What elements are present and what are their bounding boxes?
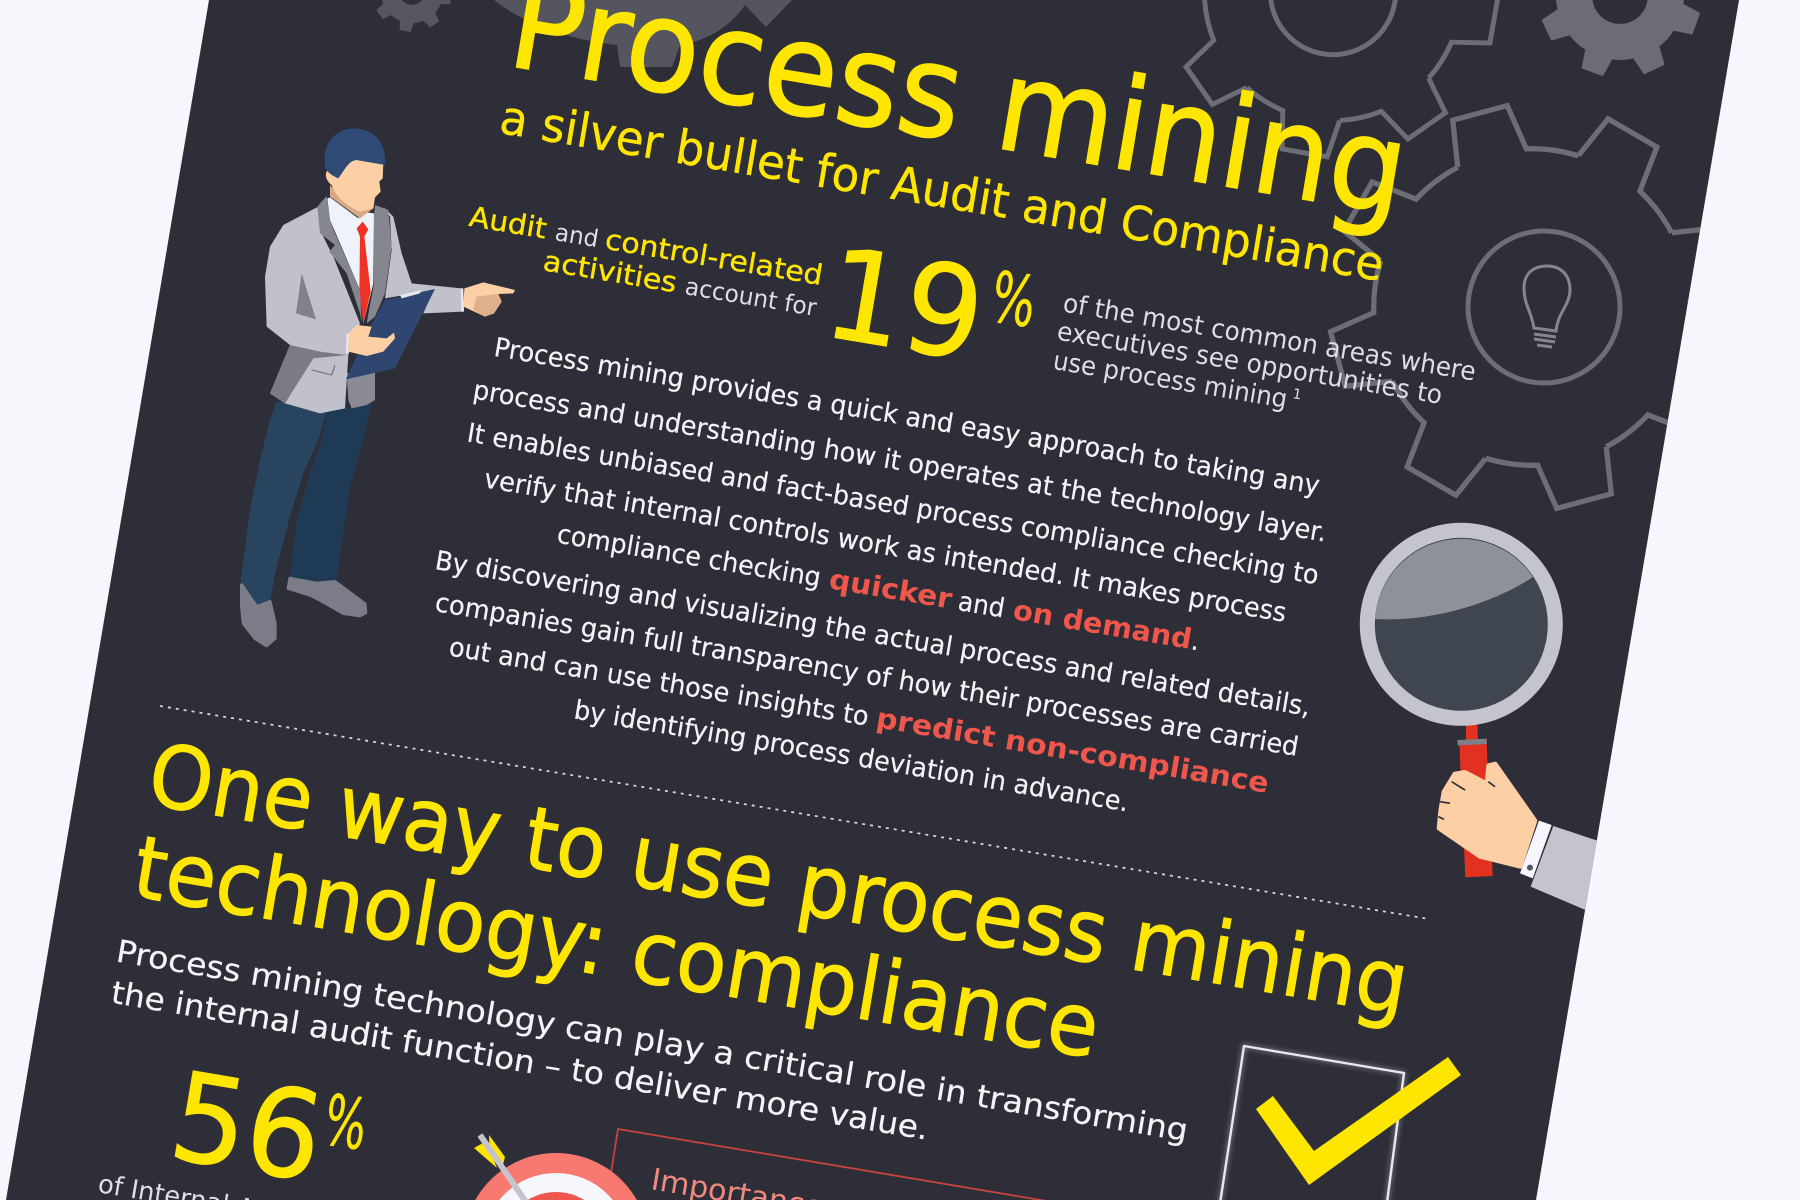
icon: large outline gear with lightbulb xyxy=(1328,102,1701,512)
stat: 19 percent: % xyxy=(985,256,1042,344)
stat intro text: control-related xyxy=(603,223,825,292)
dotted divider xyxy=(160,706,1429,919)
stat intro text: account for xyxy=(683,272,819,322)
stat description: 1 xyxy=(1291,386,1303,403)
stat: 56 percent: % xyxy=(318,1079,373,1167)
icon: target with arrow xyxy=(463,1135,649,1200)
body text: . xyxy=(1189,625,1202,657)
body text: out and can use those insights to xyxy=(447,632,871,733)
icon: small solid gear top left xyxy=(376,0,451,32)
stat intro text: activities xyxy=(541,244,679,299)
stat description: of the most common areas where xyxy=(1061,289,1478,388)
man torso, head and clipboard xyxy=(265,128,515,413)
stat description: use process mining xyxy=(1051,346,1290,415)
intro paragraph: the internal audit function – to deliver more value. xyxy=(109,975,931,1148)
body text: process and understanding how it operates at the technology layer. xyxy=(471,375,1329,549)
stat intro text xyxy=(467,200,825,322)
icon: checkbox with check mark xyxy=(1219,1046,1461,1200)
stat: 19 percent: 19 xyxy=(815,220,994,391)
red callout box xyxy=(605,1129,1100,1200)
subtitle: a silver bullet for Audit and Compliance xyxy=(496,90,1388,293)
illustration: businessman xyxy=(241,128,515,646)
body text: verify that internal controls work as intended. It makes process xyxy=(482,463,1289,629)
body text: quicker xyxy=(827,562,955,616)
hand and sleeve xyxy=(1438,764,1603,913)
icon: lightbulb xyxy=(1524,266,1570,347)
body text xyxy=(433,332,1329,818)
gears background xyxy=(366,0,1779,554)
body text: Process mining provides a quick and easy approach to taking any xyxy=(492,332,1322,501)
body text: By discovering and visualizing the actual process and related details, xyxy=(433,545,1313,723)
magnifier handle xyxy=(1457,723,1493,877)
heading: One way to use process mining technology: technology: compliance xyxy=(127,816,1107,1078)
body text: predict non-compliance xyxy=(874,701,1271,800)
man legs and shoes xyxy=(241,402,372,646)
stat intro text: Audit xyxy=(467,200,549,245)
body text: compliance checking xyxy=(555,519,823,594)
icon: lightbulb circle xyxy=(1468,231,1620,383)
icon: large solid gear behind title xyxy=(494,0,792,67)
intro paragraph: Process mining technology can play a critical role in transforming xyxy=(114,934,1191,1149)
heading: One way to use process mining technology: One way to use process mining xyxy=(142,724,1416,1035)
body text: companies gain full transparency of how their processes are carried xyxy=(433,587,1301,763)
icon: solid gear top right xyxy=(1542,0,1700,76)
body text: It enables unbiased and fact-based process compliance checking to xyxy=(465,418,1321,591)
stat intro text: and xyxy=(553,218,601,253)
stat description: executives see opportunities to xyxy=(1055,317,1444,411)
magnifier lens xyxy=(1360,523,1563,726)
illustration: magnifying glass held by hand xyxy=(1360,523,1603,913)
body text: and xyxy=(956,586,1007,624)
body text: on demand xyxy=(1011,593,1194,656)
body text: by identifying process deviation in advance. xyxy=(572,695,1131,818)
icon: outline gear top xyxy=(1182,0,1500,160)
